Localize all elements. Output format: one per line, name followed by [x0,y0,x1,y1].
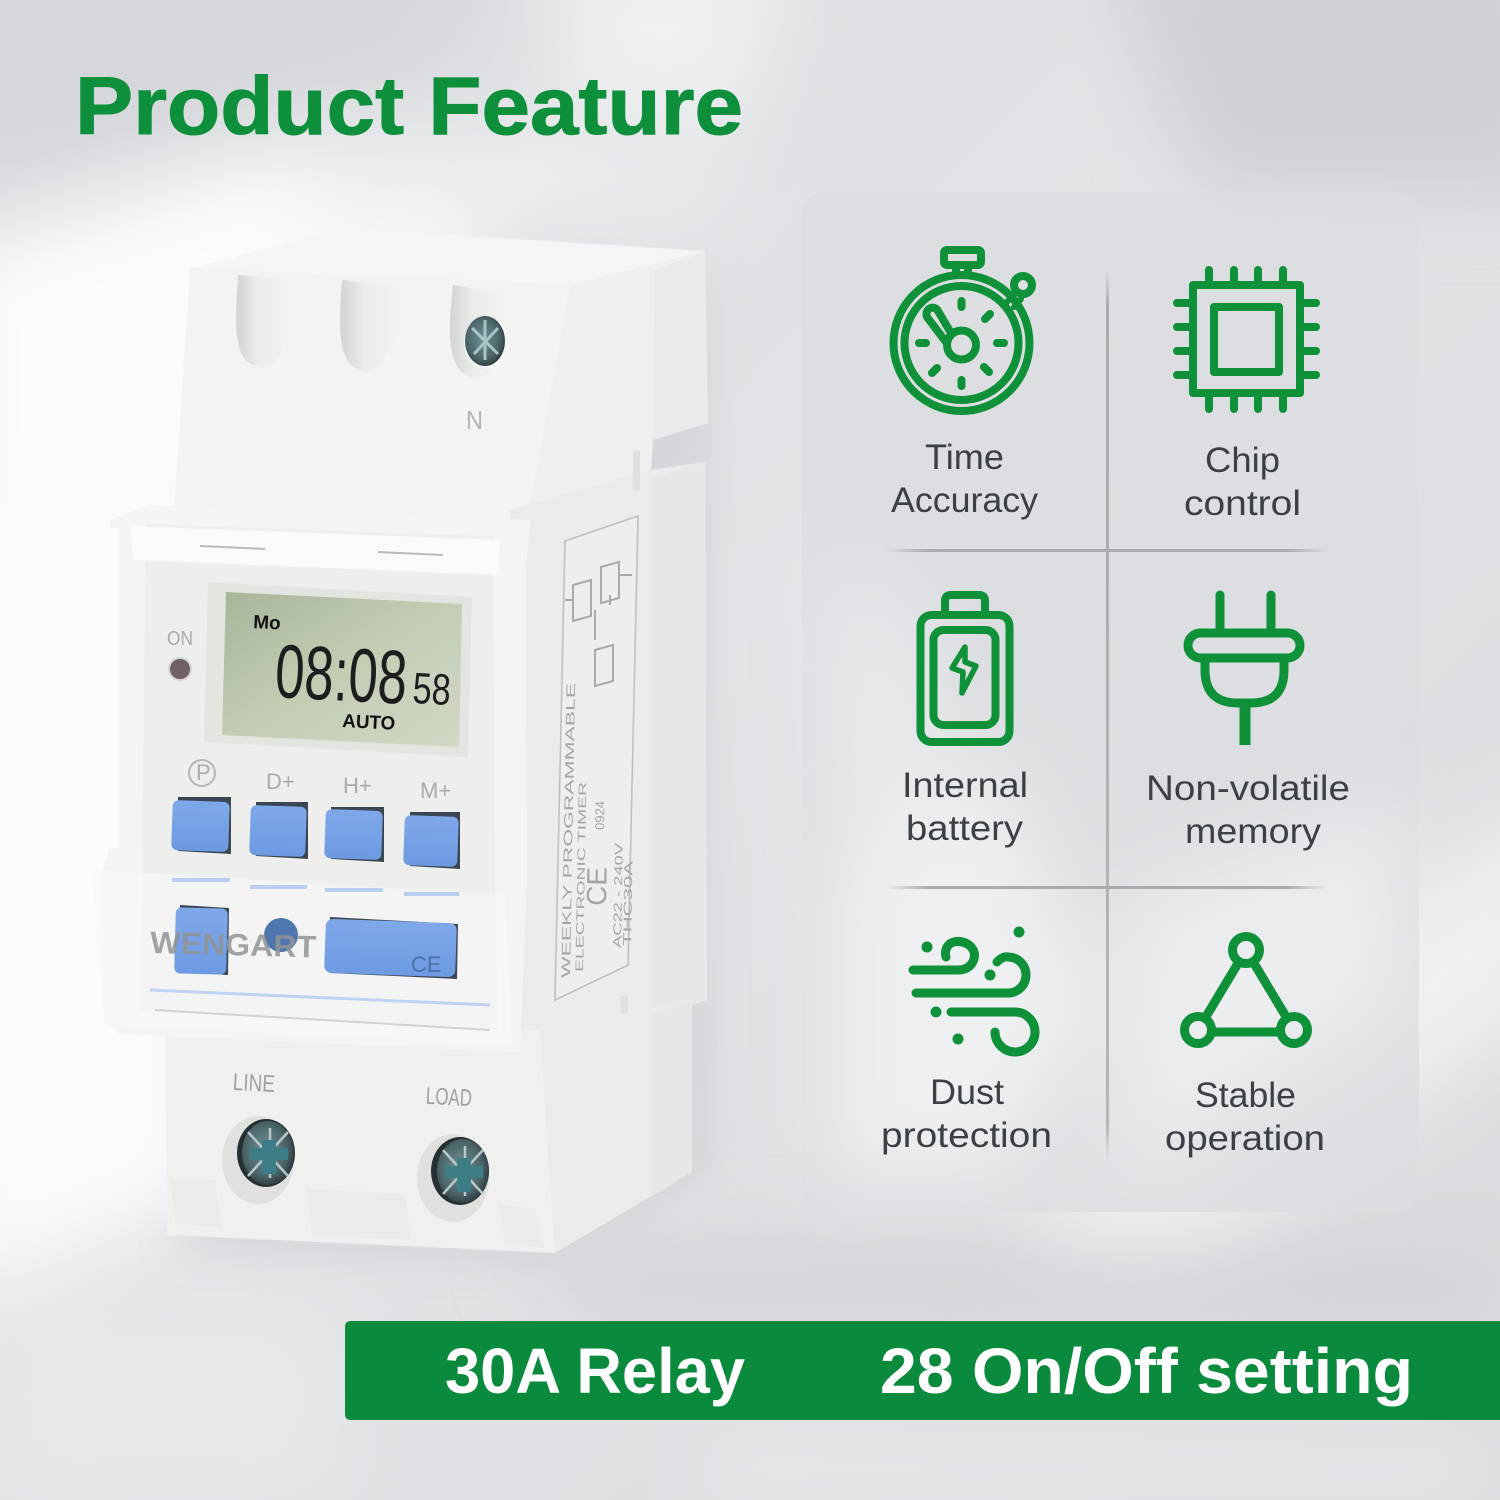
label: Time Accuracy: Accuracy [891,481,1039,520]
wiring label [555,516,638,1000]
brand watermark: WENGART [150,925,317,964]
LCD screen [204,582,472,757]
wiring label: AC22 - 240V [612,842,626,948]
icon: dust wind [913,926,1035,1052]
label: Chip control: Chip [1205,441,1280,480]
label: Internal battery: battery [906,809,1024,848]
panel dividers [885,270,1330,1160]
CE mark: CE [411,952,442,977]
ON indicator: ON [167,628,193,650]
product: timer device [92,228,712,1262]
seconds: 58 [411,664,452,715]
device lower body [165,1000,692,1253]
time: 08:08 [273,629,409,721]
icon: chip [1177,270,1316,409]
label: Non-volatile memory: memory [1185,812,1322,851]
button labels [189,760,451,803]
icon: plug [1188,595,1300,745]
day: Mo [253,612,281,634]
label LOAD: LOAD [425,1083,473,1112]
button labels: D+ [266,769,295,794]
label: Non-volatile memory: Non-volatile [1146,769,1350,808]
label: Stable operation: Stable [1195,1076,1296,1115]
title: Product Feature [75,61,743,152]
label: Time Accuracy: Time [925,438,1004,477]
panel: features [802,192,1419,1212]
device front cover [92,505,530,1052]
blue reflections [172,878,459,896]
label N: N [466,405,483,435]
mode: AUTO [342,711,396,735]
device upper body [174,228,708,560]
button labels: M+ [420,778,451,803]
feature: chip control [1177,270,1316,523]
feature: time accuracy [891,250,1039,520]
wiring label: ELECTRONIC TIMER [574,782,589,972]
blue buttons [171,797,460,979]
label: Internal battery: Internal [902,766,1028,805]
button labels: P [196,760,211,785]
top screw [464,316,510,369]
feature: dust protection [881,926,1052,1155]
label: Dust protection: Dust [930,1073,1004,1112]
lower notches [170,1178,545,1248]
feature: stable operation [1165,936,1325,1158]
wiring label: 0924 [592,801,608,830]
label: Dust protection: protection [881,1116,1052,1155]
label: Stable operation: operation [1165,1119,1325,1158]
terminal screws [222,1116,489,1222]
wiring label: THC30A [622,860,635,946]
wiring label: WEEKLY PROGRAMMABLE [559,683,578,978]
icon: stopwatch [894,250,1032,411]
feature: internal battery [902,595,1028,848]
icon: battery [920,595,1010,742]
text: 28 On/Off setting: 28 On/Off setting [880,1335,1413,1407]
label LINE: LINE [232,1069,276,1098]
text: 30A Relay: 30A Relay [445,1335,745,1407]
ON indicator [167,628,193,680]
soft shadow [170,270,712,1262]
terminal notches [236,275,518,378]
feature: non-volatile memory [1146,595,1350,851]
wiring label: CE [581,867,613,906]
label: Chip control: control [1184,484,1301,523]
button labels: H+ [343,773,372,798]
icon: triangle nodes [1184,936,1308,1044]
bottom banner [345,1321,1500,1420]
device side panel [510,450,707,1060]
